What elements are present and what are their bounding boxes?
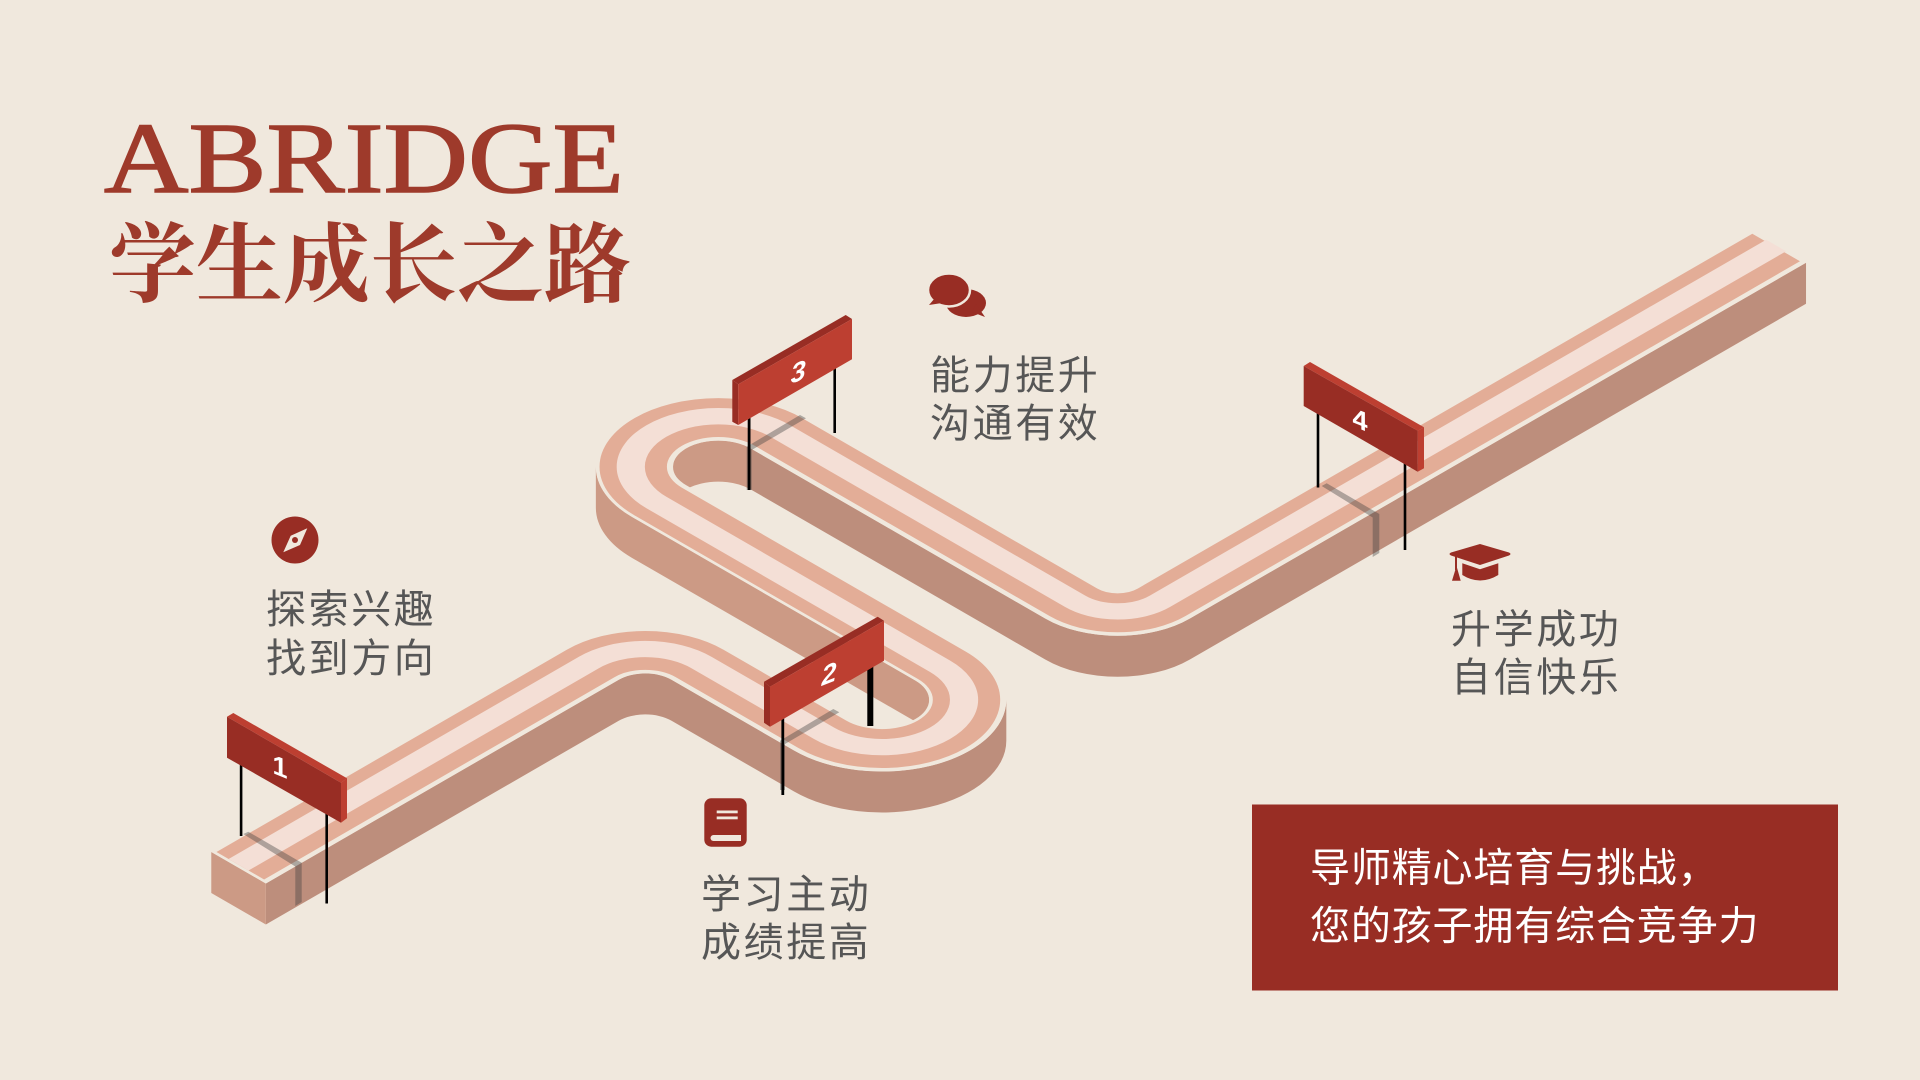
gate 2 right post [867,660,873,726]
heading: ABRIDGE: ABRIDGE [104,102,624,214]
gate 4 number: 4 [1352,402,1368,438]
gate 2 number: 2 [821,656,837,692]
gate 1 left post [240,760,242,836]
text: step 4: 升学成功 [1451,608,1621,652]
text: step 2: 学习主动 [701,873,871,917]
text: step 1: 探索兴趣 [266,588,436,632]
icon: graduation cap [1450,544,1510,581]
gate 2 [764,617,884,795]
track wall: near side dark [230,578,1068,1061]
callout background [1252,804,1838,990]
callout [1252,804,1838,990]
gate 1 [227,713,347,906]
gate 4 sign [1304,362,1424,472]
callout text: 导师精心培育与挑战， [1310,846,1718,890]
gate 1 number: 1 [272,749,288,785]
gate 3 left post [748,415,750,490]
gate 3 [732,315,852,490]
icon: compass [272,516,318,564]
icon: book [704,798,747,847]
text: step 4: 自信快乐 [1451,656,1621,700]
heading: chinese subtitle: 学生成长之路 [109,217,631,314]
gate 4 [1304,362,1424,557]
text: step 2: 成绩提高 [701,921,871,965]
step 3 [928,274,1100,446]
text: step 3: 能力提升 [930,354,1100,398]
gate 3 number: 3 [791,354,806,390]
gate 2 shadow [780,709,839,790]
gate 1 sign [227,713,347,823]
text: step 3: 沟通有效 [930,402,1100,446]
step 4 [1450,544,1621,700]
title [104,102,631,314]
gate 3 shadow [747,415,806,490]
track wall: return leg light [525,467,1000,741]
callout text: 您的孩子拥有综合竞争力 [1310,904,1759,948]
step 1 [266,516,436,681]
gate 1 shadow [243,832,302,906]
gate 4 shadow [1322,483,1379,557]
icon: chat bubbles [928,274,986,317]
track wall: final stretch dark [715,51,1842,701]
gate 3 sign [732,315,852,425]
text: step 1: 找到方向 [266,637,436,681]
track wall: upper hairpin inner [628,430,786,521]
track wall: left end face [176,852,301,924]
gate 1 right post [325,810,328,904]
gate 4 right post [1404,460,1406,550]
gate 2 left post [781,715,784,795]
step 2 [701,798,871,965]
gate 4 left post [1317,410,1319,488]
gate 3 right post [833,360,836,433]
gate 2 sign [764,617,884,727]
